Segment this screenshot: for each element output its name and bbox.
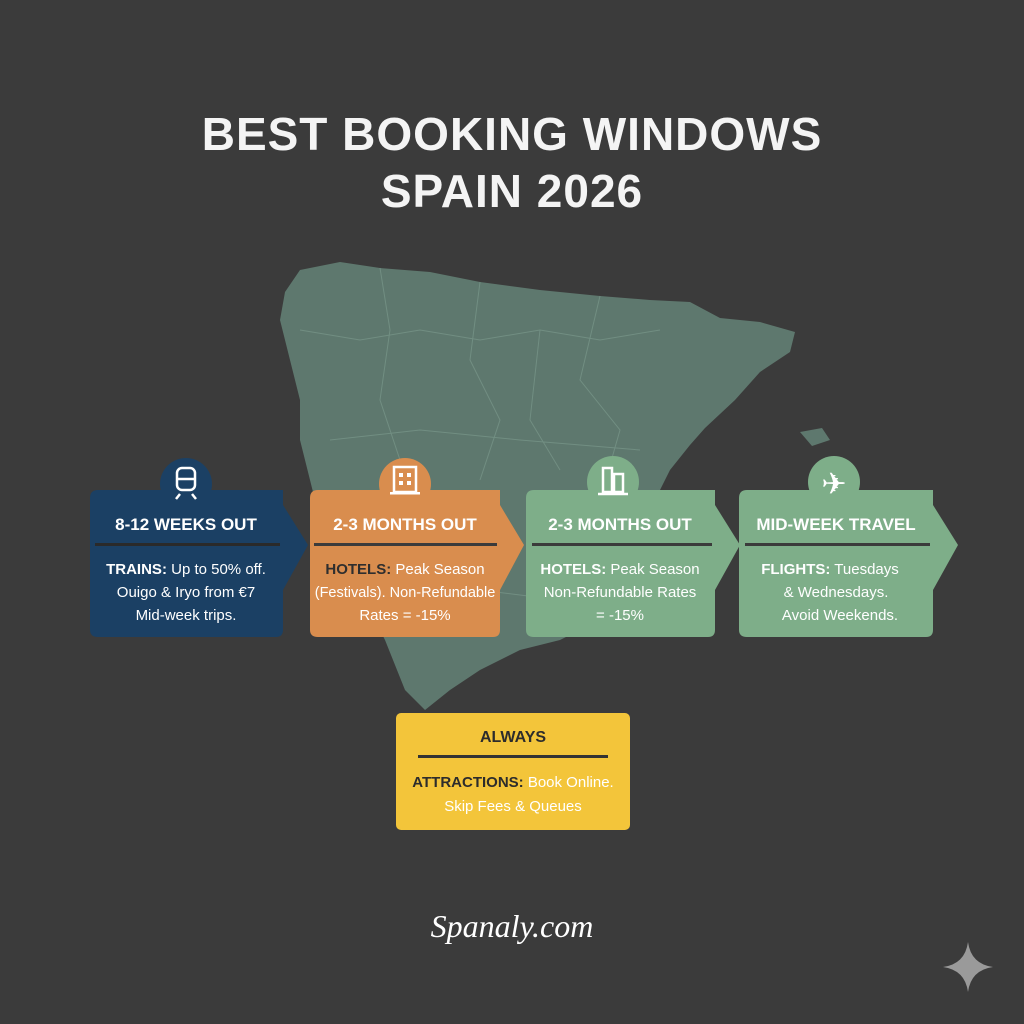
icon: train xyxy=(176,468,196,499)
panel: 2-3 months out hotels green: Non-Refundable Rates xyxy=(544,584,696,601)
panel: 8-12 weeks out xyxy=(90,458,308,637)
panel: 2-3 months out hotels green: 2-3 MONTHS OUT xyxy=(548,515,692,534)
panel: always attractions: Skip Fees & Queues xyxy=(444,798,582,815)
title xyxy=(202,108,822,217)
panel: 2-3 months out hotels green xyxy=(526,456,740,637)
panel: 8-12 weeks out: Ouigo & Iryo from €7 xyxy=(117,584,255,601)
panel: always attractions: ATTRACTIONS: Book Online. xyxy=(412,774,614,791)
panel: mid-week travel: & Wednesdays. xyxy=(784,584,888,601)
panel: 2-3 months out hotels green: = -15% xyxy=(596,607,644,624)
panel: 2-3 months out hotels orange: (Festivals). Non-Refundable xyxy=(315,585,495,601)
map of Spain xyxy=(280,262,830,710)
icon: hotel xyxy=(390,467,420,494)
title: BEST BOOKING WINDOWS xyxy=(202,108,822,160)
panel: 8-12 weeks out: Mid-week trips. xyxy=(136,607,236,624)
footer logo text: Spanaly.com xyxy=(431,908,593,944)
panel: 8-12 weeks out: 8-12 WEEKS OUT xyxy=(115,515,257,534)
title: SPAIN 2026 xyxy=(381,165,643,217)
panel: always attractions: ALWAYS xyxy=(480,729,546,746)
icon: buildings xyxy=(598,468,628,494)
panel: mid-week travel: Avoid Weekends. xyxy=(782,607,898,624)
panel: 2-3 months out hotels green: HOTELS: Peak Season xyxy=(540,561,700,578)
panel: mid-week travel: MID-WEEK TRAVEL xyxy=(756,515,916,534)
panel: 2-3 months out hotels orange xyxy=(310,458,524,637)
panel: 2-3 months out hotels orange: Rates = -15% xyxy=(359,607,451,624)
panel: mid-week travel: FLIGHTS: Tuesdays xyxy=(761,561,899,578)
icon: sparkle xyxy=(943,942,993,992)
panel: always attractions xyxy=(396,713,630,830)
panel: 8-12 weeks out: TRAINS: Up to 50% off. xyxy=(106,561,266,578)
icon: plane: ✈ xyxy=(821,467,847,502)
panel: 2-3 months out hotels orange: 2-3 MONTHS OUT xyxy=(333,515,477,534)
panel: 2-3 months out hotels orange: HOTELS: Peak Season xyxy=(325,561,485,578)
panel: mid-week travel xyxy=(739,456,958,637)
